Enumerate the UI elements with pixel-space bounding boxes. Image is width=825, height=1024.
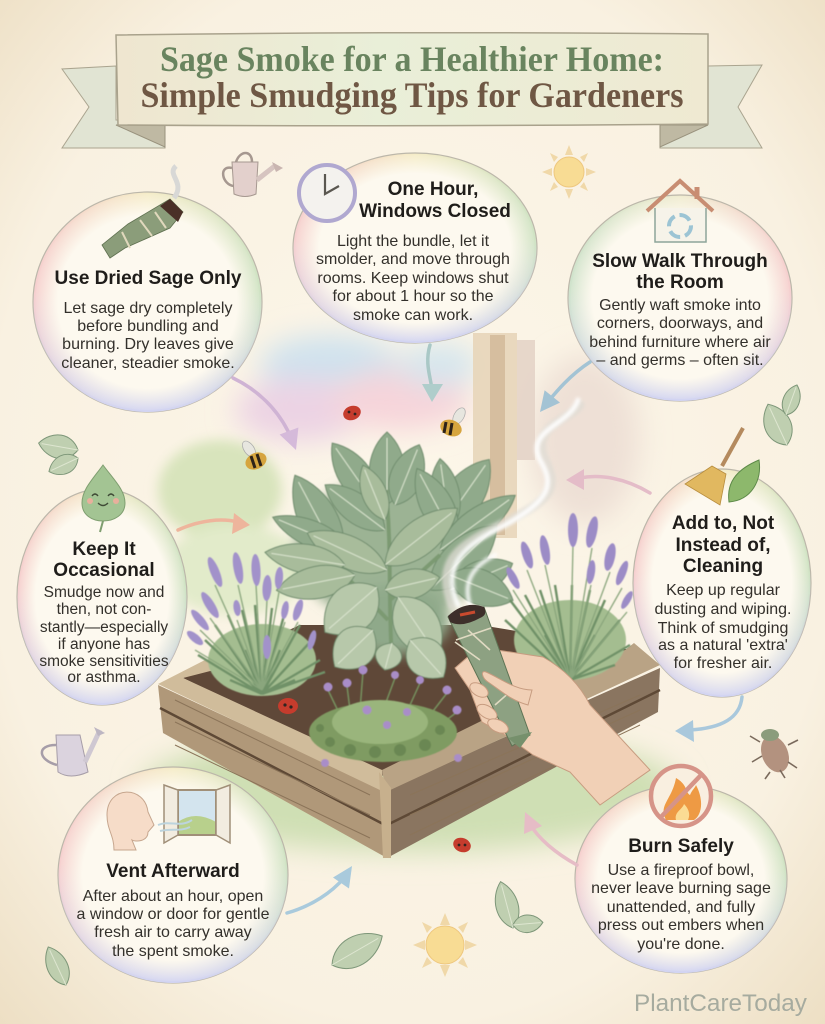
panel: burn safely: press out embers when	[598, 917, 764, 934]
panel: add to, not instead of, cleaning: Instead of,	[675, 535, 771, 556]
panel: one hour, windows closed: smoke can work.	[353, 307, 473, 324]
stems	[340, 490, 440, 660]
panel: burn safely: Burn Safely	[628, 836, 734, 857]
panel: vent afterward: Vent Afterward	[106, 861, 240, 882]
big sage plant	[263, 432, 524, 690]
panel: slow walk: Gently waft smoke into	[599, 297, 761, 314]
panel: keep it occasional: then, not con-	[57, 601, 151, 618]
panel: keep it occasional: stantly—especially	[40, 619, 168, 636]
panel: burn safely	[575, 766, 787, 973]
watermark: PlantCareToday	[634, 990, 808, 1017]
panel: keep it occasional: smoke sensitivities	[39, 653, 169, 670]
panel: keep it occasional	[17, 465, 187, 705]
foliage mass	[295, 478, 485, 655]
panel: add to, not instead of, cleaning: Think of smudging	[658, 620, 788, 637]
panel: add to, not instead of, cleaning	[633, 428, 811, 697]
panel: use dried sage: Use Dried Sage Only	[55, 268, 242, 289]
icon: clock	[299, 165, 355, 221]
panel: use dried sage	[33, 166, 262, 412]
arrow: dried sage to plant	[233, 378, 298, 450]
panel: one hour, windows closed: One Hour,	[388, 179, 478, 200]
panel: add to, not instead of, cleaning: Keep up regular	[666, 582, 781, 599]
panel: one hour, windows closed	[293, 153, 537, 343]
title text	[140, 39, 684, 115]
panel: use dried sage: Let sage dry completely	[64, 300, 232, 317]
ladybugs	[278, 403, 473, 855]
hand holding sage bundle	[448, 605, 650, 805]
panel: add to, not instead of, cleaning: Add to, Not	[672, 513, 775, 534]
panel: vent afterward	[58, 767, 288, 983]
panel: burn safely: unattended, and fully	[607, 899, 755, 916]
icon: head and window	[107, 785, 230, 850]
arrow: burn safely to bundle	[524, 812, 577, 865]
decorative leaves	[37, 382, 805, 989]
icon: house	[647, 181, 713, 242]
panel: vent afterward: a window or door for gentle	[76, 906, 270, 923]
panel: vent afterward: fresh air to carry away	[94, 924, 252, 941]
panel: add to, not instead of, cleaning: as a natural 'extra'	[658, 637, 788, 654]
panel: one hour, windows closed: smolder, and move through	[316, 251, 510, 268]
panel: keep it occasional: Keep It	[72, 539, 136, 560]
arrow: occasional to plant	[178, 513, 250, 534]
panel: slow walk: corners, doorways, and	[597, 315, 763, 332]
panel: use dried sage: burning. Dry leaves give	[62, 336, 234, 353]
panel: add to, not instead of, cleaning: Cleaning	[683, 556, 763, 577]
watering can top	[223, 153, 283, 196]
panel: one hour, windows closed: Light the bundle, let it	[337, 233, 490, 250]
panel: burn safely: you're done.	[637, 936, 725, 953]
arrow: one hour to plant	[422, 345, 443, 402]
panel: one hour, windows closed: Windows Closed	[359, 201, 511, 222]
watercolor sky wash	[235, 335, 640, 525]
arrow: cleaning to smoke	[566, 469, 650, 493]
window frame	[473, 333, 535, 538]
panel: slow walk: the Room	[636, 272, 724, 293]
arrow: vent to bed	[287, 866, 352, 913]
title text: Sage Smoke for a Healthier Home:	[160, 39, 664, 79]
front leaves	[263, 461, 468, 606]
panel: vent afterward: the spent smoke.	[112, 943, 234, 960]
raised garden bed	[158, 625, 660, 858]
panel: burn safely: never leave burning sage	[591, 880, 771, 897]
panel: one hour, windows closed: for about 1 hour so the	[332, 288, 494, 305]
bees	[240, 406, 468, 473]
panel: slow walk: Slow Walk Through	[592, 251, 768, 272]
panel: burn safely: Use a fireproof bowl,	[608, 862, 754, 879]
icon: no fire	[651, 766, 711, 826]
lavender left	[185, 551, 325, 696]
panel: add to, not instead of, cleaning: dusting and wiping.	[655, 601, 791, 618]
sun top	[542, 145, 596, 199]
panel: slow walk: – and germs – often sit.	[596, 352, 764, 369]
back leaves	[268, 432, 524, 617]
panel: slow walk	[568, 181, 792, 401]
panel: vent afterward: After about an hour, open	[83, 888, 263, 905]
panel: slow walk: behind furniture where air	[589, 334, 771, 351]
foliage wash	[140, 440, 680, 852]
arrow: cleaning to bed	[675, 697, 742, 742]
beetle	[750, 729, 798, 779]
panel: one hour, windows closed: rooms. Keep windows shut	[317, 270, 509, 287]
panel: keep it occasional: Smudge now and	[44, 584, 164, 601]
sun bottom	[413, 913, 477, 977]
panel: use dried sage: before bundling and	[77, 318, 219, 335]
fingers	[467, 672, 532, 736]
panel: keep it occasional: Occasional	[53, 560, 155, 581]
panel: keep it occasional: if anyone has	[58, 636, 150, 653]
panel: keep it occasional: or asthma.	[67, 669, 141, 686]
arrow: slow walk to window	[540, 362, 590, 412]
panel: use dried sage: cleaner, steadier smoke.	[61, 355, 235, 372]
panel: add to, not instead of, cleaning: for fresher air.	[674, 655, 772, 672]
smoke	[447, 400, 580, 605]
title text: Simple Smudging Tips for Gardeners	[140, 75, 684, 115]
icon: broom and leaf	[685, 428, 760, 505]
title banner	[62, 33, 762, 148]
watering can left	[42, 727, 105, 776]
thyme plant	[309, 666, 462, 767]
icon: sage bundle	[102, 166, 183, 258]
arrows	[178, 345, 742, 913]
icon: smiling leaf	[82, 465, 125, 532]
lavender right	[504, 513, 635, 680]
